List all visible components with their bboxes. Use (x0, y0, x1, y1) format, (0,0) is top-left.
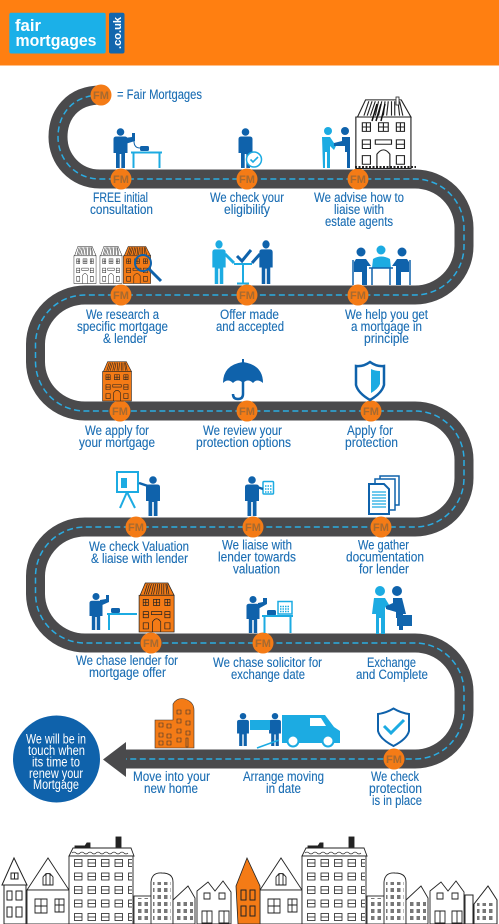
text: check eligibility (210, 190, 284, 217)
text: move in: Move into your (133, 769, 210, 784)
text: apply: We apply for (85, 423, 149, 438)
text: advise: estate agents (325, 214, 393, 229)
text: mortgage in principle: a mortgage in (351, 319, 422, 334)
icon: person with calculator (245, 476, 274, 516)
text: exchange and complete: Exchange (367, 655, 416, 670)
text: apply: your mortgage (79, 435, 155, 450)
icon: houses and magnifier (74, 247, 161, 284)
text: apply for protection (345, 423, 398, 450)
text: gather documentation: We gather (358, 538, 409, 552)
FM markers: FM (255, 638, 271, 650)
callout: renew circle: touch when (28, 743, 85, 758)
text: research (77, 307, 168, 346)
icon: movers and van (237, 713, 340, 748)
icon: phone desk and orange house (89, 583, 174, 632)
text: free initial consultation: consultation (90, 202, 153, 217)
text: check protection: protection (369, 781, 422, 796)
text: review protection (196, 423, 291, 450)
text: research: We research a (86, 307, 159, 322)
FM markers: FM (112, 406, 128, 418)
text: liaise with lender: valuation (233, 562, 280, 576)
text: offer: Offer made (220, 307, 279, 322)
text: arrange moving: in date (266, 781, 301, 796)
icon: meeting at table (353, 246, 410, 285)
text: check eligibility: eligibility (224, 202, 270, 217)
text: advise (314, 190, 404, 229)
FM markers: FM (239, 290, 255, 302)
icon: person on phone at desk (114, 128, 162, 168)
text: offer (216, 307, 284, 334)
FM markers: FM (113, 174, 129, 186)
icon: shield (356, 362, 384, 400)
text: research: specific mortgage (77, 319, 168, 334)
FM markers (90, 84, 404, 770)
FM markers: FM (350, 174, 366, 186)
logo: mortgages (16, 32, 96, 50)
text: check valuation: We check Valuation (89, 539, 189, 554)
text: chase lender: mortgage offer (89, 665, 166, 680)
road (36, 95, 464, 777)
text: liaise with lender: We liaise with (222, 538, 292, 552)
callout: renew circle: Mortgage (33, 777, 79, 792)
icon: presenter with board (117, 472, 160, 516)
FM markers: FM (143, 638, 159, 650)
callout: renew circle (13, 716, 100, 802)
text: gather documentation: documentation (346, 550, 424, 564)
callout: renew circle: We will be in (26, 732, 86, 746)
text: review protection: protection options (196, 435, 291, 450)
callout: renew circle: renew your (29, 766, 83, 781)
text: chase solicitor: exchange date (231, 667, 305, 682)
icon: orange apartment building (155, 699, 194, 748)
FM markers: FM (93, 90, 109, 102)
FM markers: FM (363, 406, 379, 418)
icon: phone desk and calendar (246, 596, 293, 633)
FM markers: FM (239, 406, 255, 418)
icon: handshake with briefcase (372, 586, 412, 634)
text: mortgage in principle: principle (364, 331, 409, 346)
text: chase lender: We chase lender for (76, 653, 178, 668)
icon: offer made handshake over table (212, 240, 273, 284)
text: apply for protection: Apply for (347, 423, 393, 438)
text: arrange moving (243, 769, 324, 796)
text: exchange and complete: and Complete (356, 667, 428, 682)
icon: shield with check (378, 708, 409, 746)
text: check protection: We check (371, 769, 419, 784)
text: liaise with lender: lender towards (218, 550, 296, 564)
text: move in (133, 769, 210, 796)
logo: .co.uk (112, 16, 124, 49)
FM markers: FM (128, 522, 144, 534)
text: exchange and complete (356, 655, 428, 682)
text: mortgage in principle: We help you get (345, 307, 428, 322)
text: check valuation (89, 539, 189, 566)
text: arrange moving: Arrange moving (243, 769, 324, 784)
text: liaise with lender (218, 538, 296, 576)
text: review protection: We review your (203, 423, 282, 438)
text: check valuation: & liaise with lender (91, 551, 188, 566)
FM markers: FM (245, 522, 261, 534)
text: research: & lender (103, 331, 147, 346)
text: check protection (369, 769, 422, 808)
text: advise: We advise how to (314, 190, 404, 205)
text: apply for protection: protection (345, 435, 398, 450)
text: advise: liaise with (334, 202, 384, 217)
header bar (0, 0, 499, 66)
text: chase solicitor (213, 655, 322, 682)
FM markers: FM (386, 754, 402, 766)
text: free initial consultation: FREE initial (93, 190, 148, 205)
icon: umbrella (223, 359, 263, 399)
text: check eligibility: We check your (210, 190, 284, 205)
text: mortgage in principle (345, 307, 428, 346)
logo: fair (15, 17, 42, 35)
text: offer: and accepted (216, 319, 284, 334)
text: apply (79, 423, 155, 450)
icon: documents (369, 476, 399, 514)
FM markers: FM (239, 174, 255, 186)
text: gather documentation (346, 538, 424, 576)
text: move in: new home (144, 781, 198, 796)
text: gather documentation: for lender (359, 562, 409, 576)
legend text: = Fair Mortgages (117, 87, 202, 102)
text: check protection: is in place (372, 793, 422, 808)
text: chase lender (76, 653, 178, 680)
FM markers: FM (113, 290, 129, 302)
icon: handshake and house (322, 97, 416, 168)
icon: orange house (103, 362, 131, 401)
text: chase solicitor: We chase solicitor for (213, 655, 322, 670)
text: free initial consultation (90, 190, 153, 217)
callout: renew circle: its time to (32, 754, 80, 770)
FM markers: FM (350, 290, 366, 302)
FM markers: FM (373, 522, 389, 534)
icon: person with check (238, 128, 262, 168)
skyline of houses (2, 837, 497, 924)
logo (9, 13, 124, 53)
